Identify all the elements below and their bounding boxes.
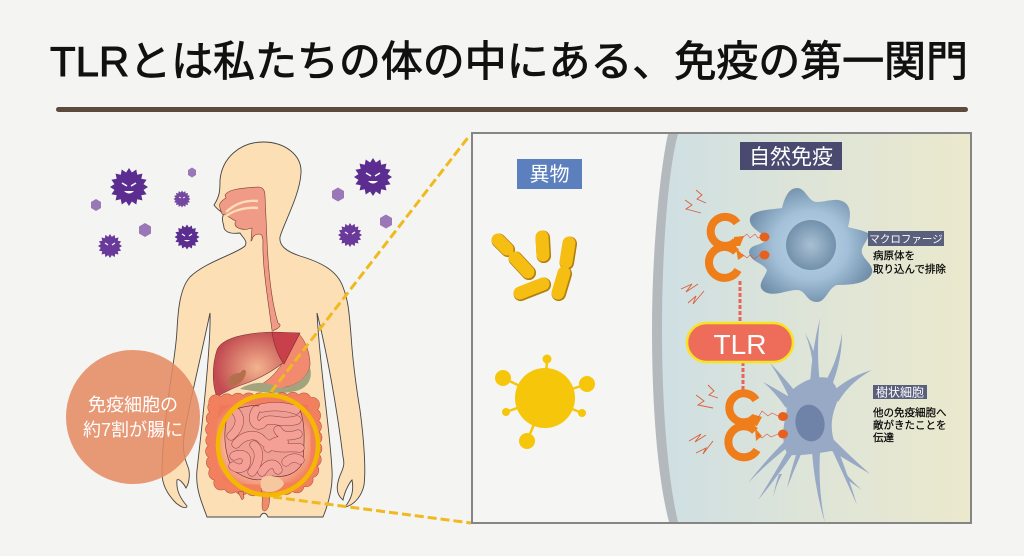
macrophage label and text: 病原体を bbox=[873, 250, 915, 262]
TLR label pill bbox=[687, 323, 793, 362]
big virus left bbox=[110, 168, 148, 206]
TLR label pill: TLR bbox=[714, 329, 766, 360]
stomach bbox=[258, 333, 310, 392]
dashed connectors bbox=[740, 281, 743, 392]
dendritic cell label and text bbox=[873, 384, 946, 444]
pancreas bbox=[240, 368, 311, 393]
callout circle: 約7割が腸に bbox=[83, 420, 183, 440]
callout circle: 免疫細胞の bbox=[88, 395, 178, 415]
macrophage cell bbox=[749, 188, 872, 302]
intestine highlight ring bbox=[218, 395, 318, 495]
macrophage label and text: マクロファージ bbox=[869, 234, 943, 246]
label: foreign substance: 異物 bbox=[530, 163, 570, 186]
zoom connector lines bbox=[271, 135, 471, 523]
icon: yellow virus bbox=[495, 354, 595, 449]
icon: rod bacteria bbox=[498, 237, 570, 294]
cell membrane background bbox=[652, 134, 970, 522]
panel: innate immunity close-up bbox=[472, 133, 971, 523]
illustration: human body with organs bbox=[162, 142, 365, 517]
dendritic cell label and text: 樹状細胞 bbox=[876, 384, 924, 400]
big virus right bbox=[354, 158, 392, 196]
label: foreign substance bbox=[517, 159, 582, 189]
dendritic cell bbox=[748, 318, 872, 523]
TLR receptors bottom bbox=[689, 385, 788, 457]
dendritic cell label and text: 他の免疫細胞へ bbox=[873, 406, 946, 419]
callout circle bbox=[66, 350, 200, 484]
label: innate immunity: 自然免疫 bbox=[749, 146, 833, 169]
small intestine bbox=[225, 405, 304, 492]
macrophage label and text: 取り込んで排除 bbox=[873, 262, 946, 276]
large intestine bbox=[213, 400, 315, 511]
body silhouette bbox=[162, 142, 365, 517]
TLR receptors top bbox=[681, 190, 770, 304]
macrophage label and text bbox=[868, 231, 946, 276]
viruses bbox=[91, 158, 392, 258]
small hexagons bbox=[91, 168, 392, 237]
medium viruses bbox=[174, 224, 200, 250]
dendritic cell label and text: 伝達 bbox=[873, 432, 894, 444]
liver bbox=[213, 332, 284, 397]
title: TLRとは私たちの体の中にある、免疫の第一関門 bbox=[50, 38, 968, 85]
label: innate immunity bbox=[740, 142, 842, 170]
panel frame bbox=[472, 133, 971, 523]
esophagus and nasal cavity bbox=[220, 187, 280, 330]
dendritic cell label and text: 敵がきたことを bbox=[873, 418, 946, 432]
